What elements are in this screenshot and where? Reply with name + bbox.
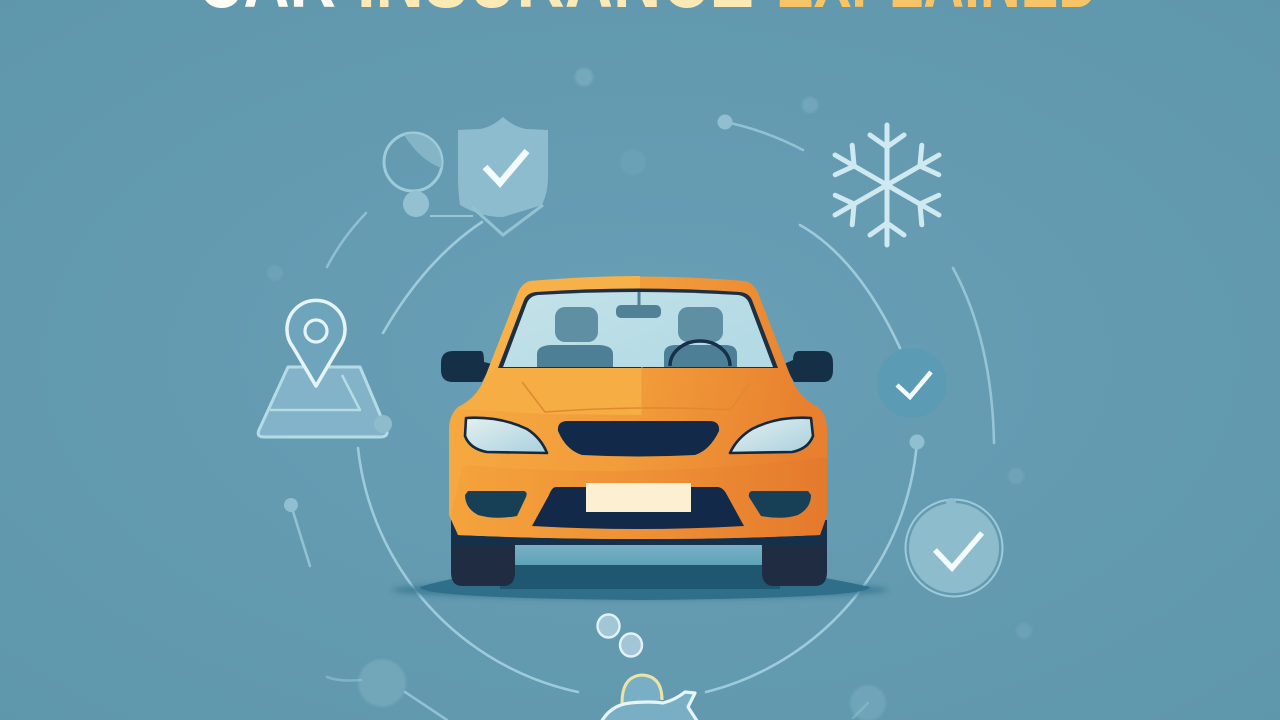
map node [374,415,392,433]
hood creases [522,367,750,415]
side mirrors [441,351,833,382]
orbit node dots [284,114,924,512]
left headlight [465,418,547,453]
map tile [258,367,387,437]
lower intake [532,487,744,529]
right headlight [730,418,813,453]
right fog light [749,491,811,518]
icon: check badge [877,348,947,418]
hood left highlight [460,367,642,415]
orbit arcs [291,122,994,720]
icon: snowflake [827,125,947,245]
left fog light [465,491,527,518]
roof highlight [484,276,640,380]
map marker [287,300,345,386]
icon: round check [906,498,1002,596]
car [441,276,833,586]
rear-view mirror [616,292,661,318]
icon: shield with check [458,117,548,235]
marker hole [305,320,327,342]
license plate [586,483,691,512]
wheels [451,520,827,586]
underbody [451,530,827,545]
windshield glass [503,292,773,367]
icon: map pin [258,300,392,437]
coins [598,614,642,656]
grille [558,421,719,456]
ground shadow [392,565,888,600]
steering wheel [670,341,730,366]
background dots [267,68,1032,720]
car body [449,276,827,539]
gap under car [515,545,762,565]
icon: piggy bank [600,675,699,720]
lower bumper [451,457,827,539]
windshield frame [498,288,778,368]
seats [537,307,737,367]
title [197,0,1099,25]
icon: magnifier [384,133,473,217]
